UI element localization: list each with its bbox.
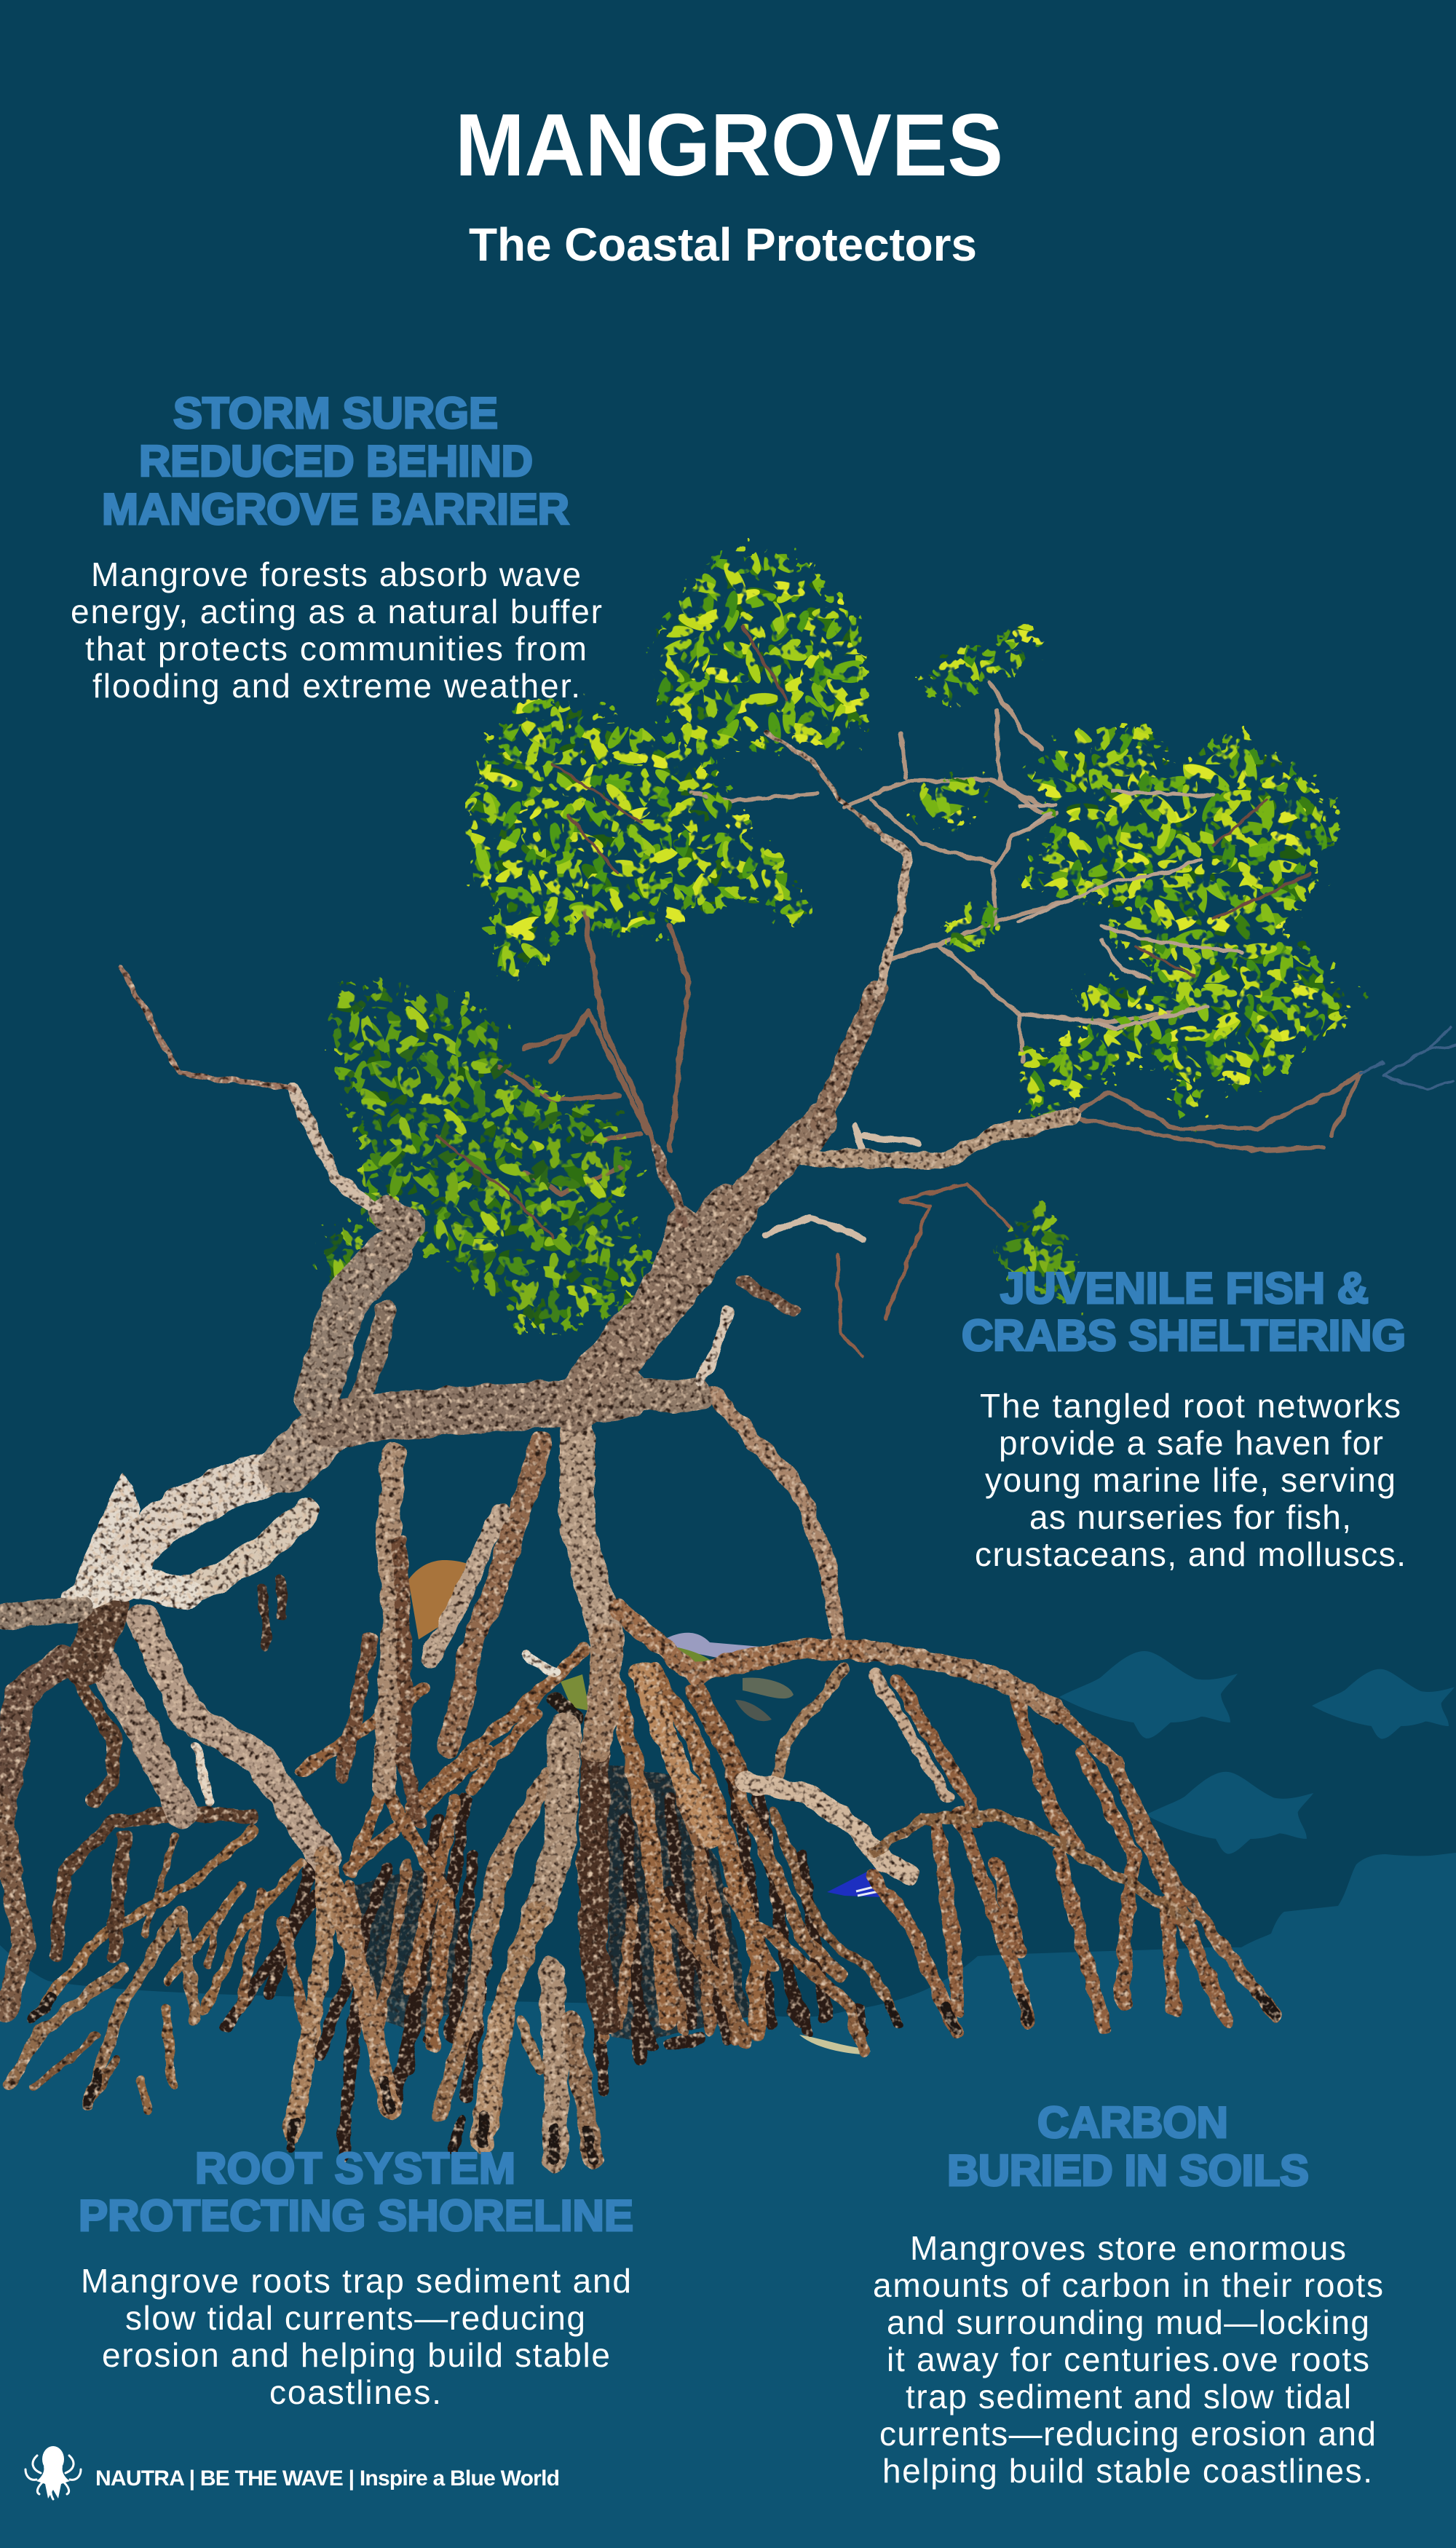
root: left second leg xyxy=(98,1654,182,1813)
roots: mid tan over dark xyxy=(240,1747,772,2038)
root: pale upright B2 xyxy=(429,1512,500,1660)
hill: green strip xyxy=(673,1647,721,1677)
root: upright A2 xyxy=(342,1543,419,1820)
twigs: dark in canopy xyxy=(437,626,1310,1238)
limb: dark knot below bleached mass xyxy=(86,1605,109,1663)
hill: orange patch right B xyxy=(735,1700,772,1721)
heading: root system: PROTECTING SHORELINE xyxy=(79,2191,633,2240)
text: carbon body: trap sediment and slow tidal xyxy=(906,2378,1351,2416)
panel: root system xyxy=(79,2144,633,2411)
trunk: lower left A xyxy=(317,1252,389,1396)
root: upright B xyxy=(448,1444,542,1746)
text: juvenile fish body: provide a safe haven for xyxy=(999,1424,1383,1462)
text: juvenile fish body: crustaceans, and molluscs. xyxy=(975,1535,1406,1573)
flag stripes xyxy=(856,1886,882,1896)
root: white shard left xyxy=(195,1747,210,1802)
heading: carbon: CARBON xyxy=(1037,2098,1228,2147)
root: stump lower xyxy=(487,1913,537,2126)
text: juvenile fish body: as nurseries for fish, xyxy=(1029,1498,1351,1536)
limb: bleached stump xyxy=(66,1473,140,1597)
mangrove tree xyxy=(0,510,1455,2160)
root: right thin long xyxy=(774,1812,899,2025)
root: arc descending xyxy=(1059,1714,1275,2014)
text: carbon body: currents—reducing erosion and xyxy=(879,2415,1376,2453)
text: juvenile fish body: young marine life, serving xyxy=(985,1461,1396,1499)
text: footer tagline: NAUTRA | BE THE WAVE | Inspire a Blue World xyxy=(95,2466,560,2490)
footer xyxy=(25,2446,560,2499)
roots: centre diagonals xyxy=(302,1648,585,2046)
photo remnants: distant hills and flag xyxy=(408,1560,884,2054)
limb: bleached band xyxy=(120,1468,286,1580)
roots: right pale long xyxy=(641,1673,713,1837)
panel: juvenile fish xyxy=(962,1264,1406,1573)
text: carbon body xyxy=(873,2229,1383,2490)
roots: centre lower long xyxy=(439,1855,507,2114)
flag: blue boat xyxy=(827,1868,884,1897)
branch: curved white xyxy=(700,1310,728,1383)
twigs over foliage xyxy=(437,626,1310,1238)
text: carbon body: amounts of carbon in their roots xyxy=(873,2266,1383,2304)
roots: dark mass right centre xyxy=(604,1762,750,2038)
root: upright A xyxy=(384,1456,393,1788)
heading: juvenile fish xyxy=(962,1264,1406,1360)
limb: knob end xyxy=(626,1394,695,1396)
limb: bleached lower band xyxy=(189,1512,306,1589)
branch: side limb xyxy=(797,1117,1071,1161)
text: carbon body: helping build stable coastlines. xyxy=(882,2452,1372,2490)
twigs: pale lower xyxy=(767,1125,919,1239)
foliage: bright clusters xyxy=(464,538,1369,1133)
twigs: right side branch xyxy=(1071,1072,1361,1150)
roots: right of pier, tan xyxy=(612,1673,757,2031)
text: carbon body: it away for centuries.ove roots xyxy=(887,2341,1369,2378)
roots: left fan thin xyxy=(33,1837,218,2097)
roots: left fan xyxy=(33,1829,302,2110)
text: root system body: slow tidal currents—reducing xyxy=(125,2299,585,2337)
twigs: lower hanging xyxy=(837,1184,1012,1356)
limb: main horizontal xyxy=(332,1394,626,1423)
roots: dark mass left centre xyxy=(349,1864,484,2031)
limb: shoulder xyxy=(286,1423,332,1468)
text: juvenile fish body xyxy=(975,1387,1406,1573)
roots: right thick xyxy=(696,1690,740,1777)
heading: root system: ROOT SYSTEM xyxy=(195,2144,515,2193)
limb: hanging stubs xyxy=(264,1580,282,1645)
heading: root system xyxy=(79,2144,633,2240)
root: right arc sub roots xyxy=(874,1680,1227,2031)
root: bottom legs xyxy=(481,2021,498,2143)
twigs: upper canopy xyxy=(692,682,1198,1061)
heading: carbon: BURIED IN SOILS xyxy=(947,2146,1309,2195)
heading: juvenile fish: CRABS SHELTERING xyxy=(962,1311,1406,1360)
root: pale second arc xyxy=(746,1781,910,1875)
trunk: second xyxy=(587,1223,685,1379)
title: MANGROVES xyxy=(455,95,1003,194)
heading: storm surge: STORM SURGE xyxy=(173,389,498,438)
trunk: second thin xyxy=(655,1150,685,1223)
root: white shard xyxy=(526,1655,554,1673)
foliage: darker clusters xyxy=(313,977,1083,1335)
root: pier main xyxy=(577,1432,608,1638)
trunk: left thin tip xyxy=(122,967,293,1089)
root: bottom legs second xyxy=(551,1969,557,2160)
text: root system body: erosion and helping build stable xyxy=(102,2336,610,2374)
root: lower right arc xyxy=(874,1814,1190,1920)
root: left limb lower B xyxy=(293,1859,325,2134)
text: carbon body: and surrounding mud—locking xyxy=(887,2303,1369,2341)
limb: knuckle xyxy=(76,1578,186,1599)
fish silhouette 1 xyxy=(1059,1651,1238,1738)
fish silhouette 3 xyxy=(1146,1772,1313,1854)
root: left limb lower A xyxy=(325,1859,390,2110)
roots: left stubs dark xyxy=(55,1675,253,1955)
root: arc start xyxy=(618,1609,874,1674)
roots: dark back layer xyxy=(227,1701,863,2155)
root: connector thin xyxy=(777,1669,844,1777)
root: left limb upper diagonal xyxy=(143,1621,325,1859)
roots: left fan stout xyxy=(9,1913,195,2105)
root: big stump xyxy=(537,1728,565,1913)
root: pier lower xyxy=(596,1638,608,1747)
text: juvenile fish body: The tangled root networks xyxy=(980,1387,1401,1425)
heading: carbon xyxy=(947,2098,1309,2195)
roots: right thin sets xyxy=(662,1795,863,2049)
patch: pale shoreline foam xyxy=(799,2035,870,2054)
root: bottom legs thin xyxy=(521,2021,540,2070)
icon: octopus xyxy=(25,2446,81,2499)
text: storm surge body xyxy=(71,555,602,705)
root: left arc xyxy=(473,1777,548,2021)
root: pale sub root xyxy=(874,1674,948,1797)
twigs: thin rising stems xyxy=(499,911,689,1194)
roots and trunks xyxy=(0,732,1275,2160)
trunk: right main upper xyxy=(820,991,877,1121)
branch: stub xyxy=(743,1281,794,1310)
limb: left stub xyxy=(0,1609,80,1618)
trunk: crown stem xyxy=(767,732,885,838)
twigs: far right blue tips xyxy=(1361,1028,1455,1089)
text: root system body xyxy=(81,2262,631,2411)
hill: orange left xyxy=(408,1560,475,1639)
trunk: left pale branch xyxy=(293,1089,375,1208)
root: far left lower xyxy=(0,1805,24,2011)
root: centre dark pier xyxy=(593,1742,607,2021)
trunk: right main base xyxy=(577,1211,731,1405)
trunk: right main thin xyxy=(877,838,906,991)
panel: storm surge xyxy=(71,389,602,705)
fish silhouette 2 xyxy=(1312,1669,1455,1739)
text: root system body: Mangrove roots trap sediment and xyxy=(81,2262,631,2300)
heading: juvenile fish: JUVENILE FISH & xyxy=(1000,1264,1369,1313)
root: bottom legs third xyxy=(571,2021,593,2160)
heading: storm surge xyxy=(102,389,569,534)
hill: left green sliver xyxy=(561,1674,590,1711)
text: root system body: coastlines. xyxy=(269,2373,441,2411)
subtitle: The Coastal Protectors xyxy=(469,218,977,271)
root: dark shard xyxy=(557,1701,577,1718)
text: storm surge body: that protects communities from xyxy=(85,630,587,668)
root: connecting limb xyxy=(715,1396,839,1639)
text: carbon body: Mangroves store enormous xyxy=(910,2229,1346,2267)
roots: wet dark tips xyxy=(33,1995,1275,2160)
text: storm surge body: flooding and extreme weather. xyxy=(92,667,580,705)
trunk: left top bend xyxy=(386,1212,408,1252)
seabed and hill xyxy=(0,1853,1456,2548)
text: storm surge body: Mangrove forests absorb wave xyxy=(91,555,581,593)
twigs behind foliage xyxy=(499,682,1455,1356)
trunk: lower left B xyxy=(357,1310,386,1405)
trunk: right main mid xyxy=(731,1121,820,1211)
heading: storm surge: MANGROVE BARRIER xyxy=(102,485,569,534)
root: upper right arc xyxy=(874,1651,1059,1714)
text: storm surge body: energy, acting as a natural buffer xyxy=(71,593,602,630)
panel: carbon xyxy=(873,2098,1383,2490)
hill: orange patch right A xyxy=(743,1677,794,1698)
hill: mountain grey xyxy=(664,1633,761,1660)
heading: storm surge: REDUCED BEHIND xyxy=(139,437,533,486)
root: far left dark xyxy=(0,1660,66,1817)
